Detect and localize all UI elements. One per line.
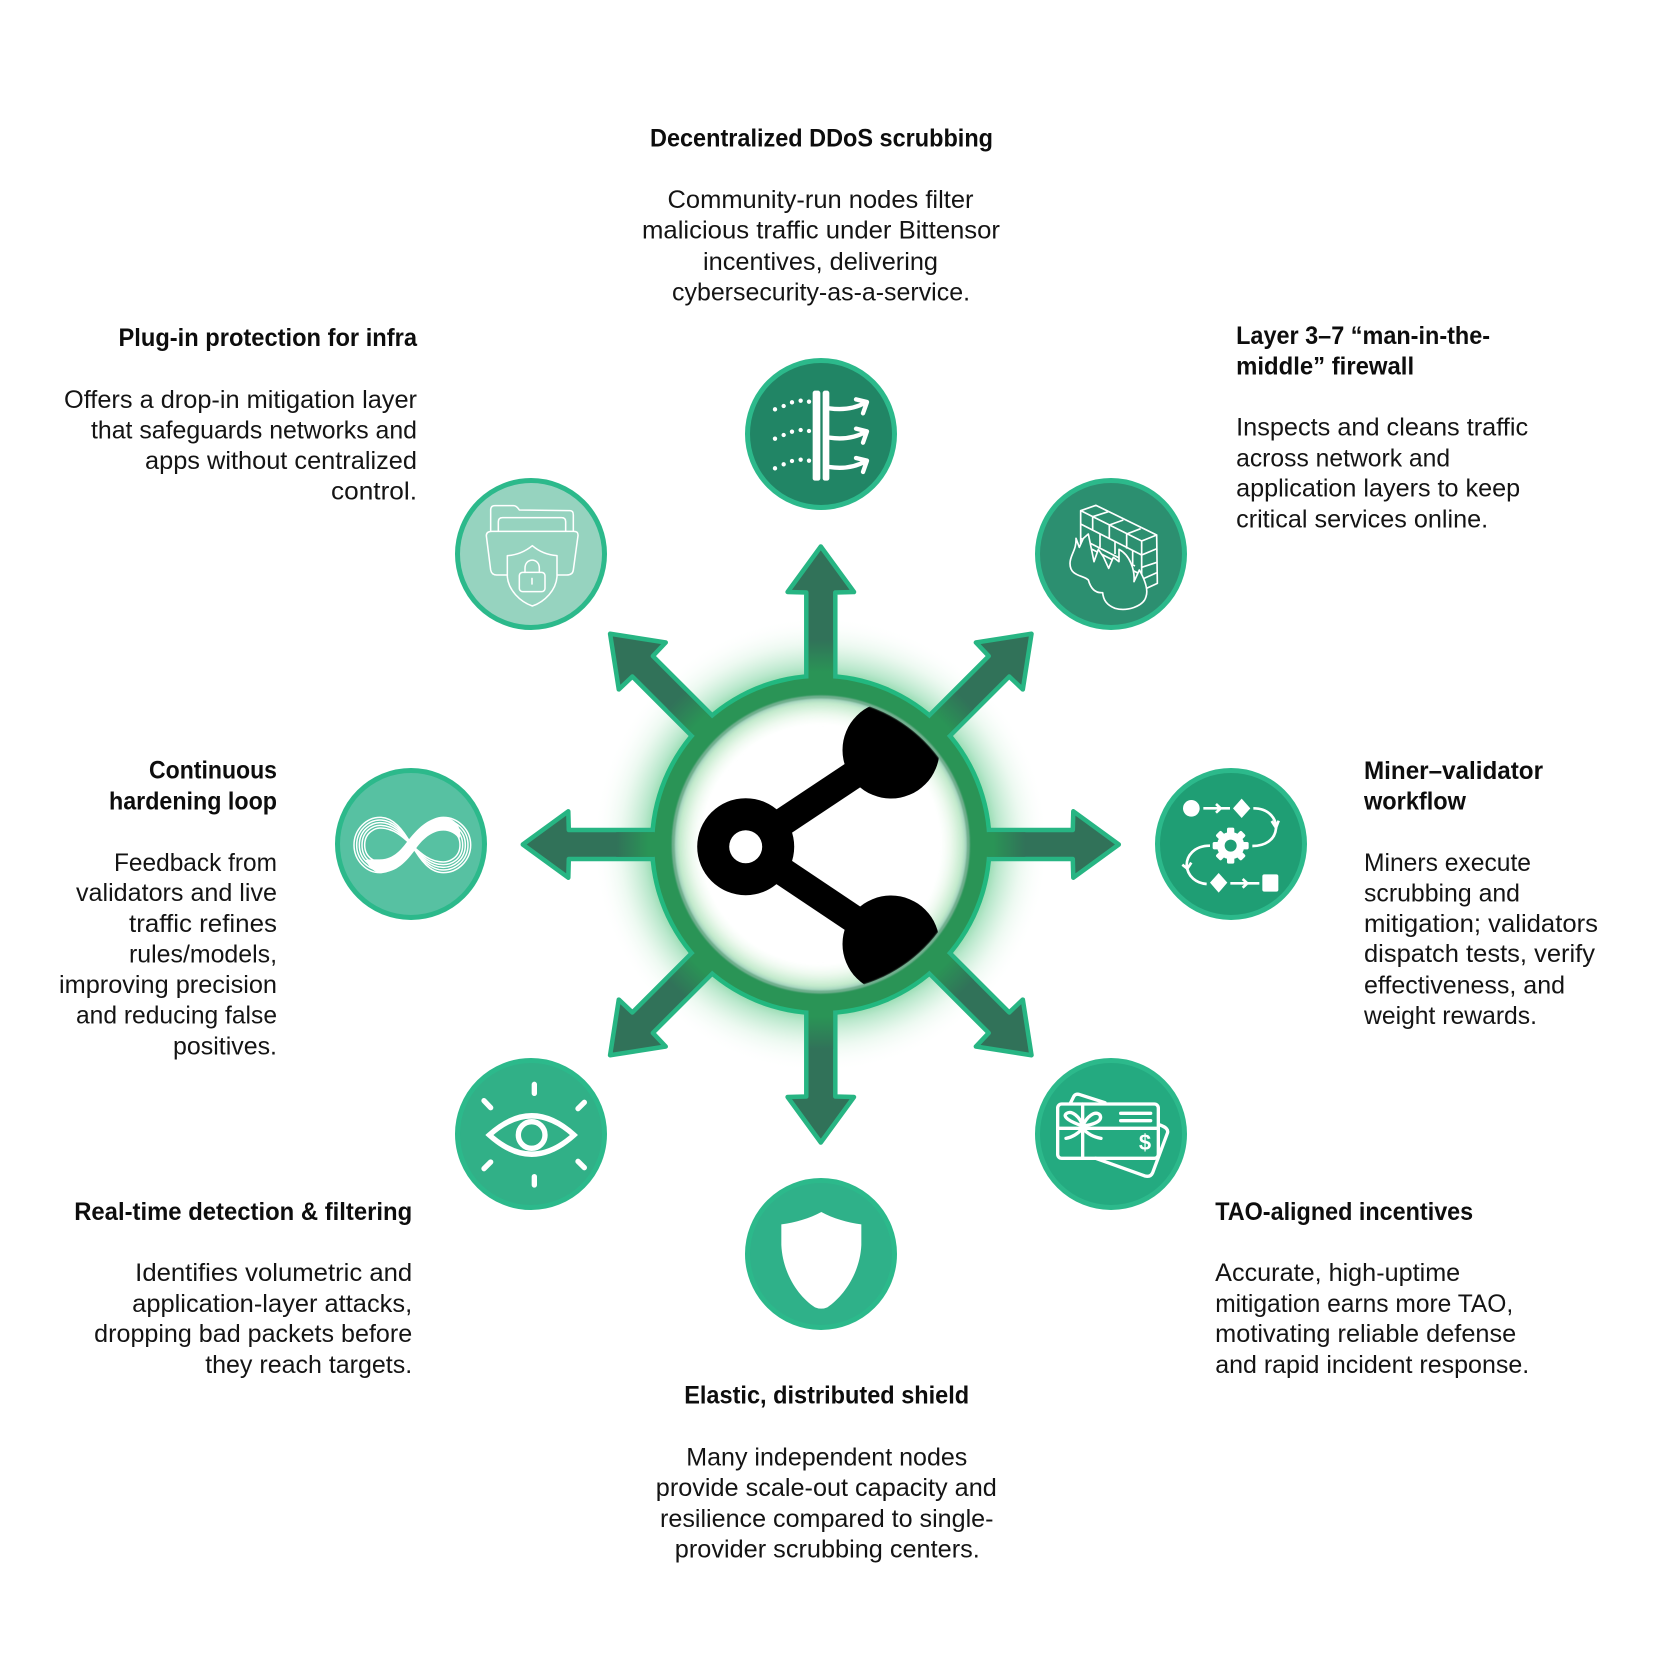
body: [64, 386, 417, 506]
body: Community-run nodes filter: [668, 186, 974, 214]
body: and reducing false: [76, 1002, 277, 1030]
hub dark ring: [654, 678, 987, 1011]
body: they reach targets.: [205, 1351, 412, 1379]
panel: firewall icon: [1038, 480, 1184, 628]
body: control.: [331, 478, 417, 506]
icon: eye: [484, 1084, 584, 1185]
heading: Decentralized DDoS scrubbing: [650, 124, 993, 152]
icon: miner validator flow: [1182, 799, 1279, 893]
body: mitigation earns more TAO,: [1215, 1290, 1513, 1318]
body: across network and: [1236, 444, 1450, 472]
body: dispatch tests, verify: [1364, 940, 1596, 968]
body: [1215, 1259, 1529, 1379]
body: weight rewards.: [1363, 1002, 1537, 1030]
panel: detection icon: [458, 1060, 604, 1208]
icon: shield: [781, 1212, 861, 1309]
arrow: south: [788, 1009, 854, 1142]
heading: workflow: [1363, 787, 1467, 815]
body: effectiveness, and: [1364, 972, 1565, 1000]
body: provider scrubbing centers.: [675, 1536, 980, 1564]
icon: gift cards: $: [1139, 1130, 1151, 1155]
arrows radiating from the hub: [523, 546, 1119, 1142]
body: [1363, 849, 1598, 1030]
body: positives.: [173, 1032, 277, 1060]
text block: TAO-aligned incentives: [1215, 1198, 1529, 1379]
body: mitigation; validators: [1364, 910, 1598, 938]
body: apps without centralized: [145, 447, 417, 475]
arrow: west: [523, 811, 656, 878]
arrow: south-west: [587, 937, 728, 1079]
arrow: north: [788, 546, 854, 680]
arrow: north-west: [587, 610, 728, 752]
text block: elastic distributed shield: [656, 1382, 997, 1564]
body: motivating reliable defense: [1215, 1320, 1516, 1348]
heading: TAO-aligned incentives: [1215, 1198, 1473, 1226]
panel: workflow icon: [1158, 770, 1304, 918]
panel: distributed shield icon: [748, 1180, 894, 1328]
heading: Layer 3–7 “man-in-the-: [1236, 322, 1490, 350]
text block: layer 3-7 firewall: [1236, 322, 1528, 534]
body: Identifies volumetric and: [135, 1259, 412, 1287]
body: critical services online.: [1236, 506, 1488, 534]
body: Offers a drop-in mitigation layer: [64, 386, 417, 414]
heading: Elastic, distributed shield: [684, 1382, 969, 1410]
text block: miner-validator workflow: [1363, 757, 1598, 1030]
arrow: north-east: [914, 610, 1055, 752]
icon: gift cards: [1058, 1094, 1168, 1176]
body: [1236, 414, 1528, 534]
panel: hardening loop icon: [338, 770, 484, 918]
body: [642, 186, 1000, 306]
body: malicious traffic under Bittensor: [642, 216, 1000, 244]
body: Inspects and cleans traffic: [1236, 414, 1528, 442]
central hub with arrows: [523, 546, 1119, 1142]
text block: decentralized DDoS scrubbing: [642, 124, 1000, 306]
body: scrubbing and: [1364, 880, 1520, 908]
text block: plug-in protection: [64, 324, 418, 506]
body: traffic refines: [129, 910, 277, 938]
body: application-layer attacks,: [132, 1290, 412, 1318]
heading: [1236, 322, 1490, 380]
panel: decentralized scrubbing icon: [748, 360, 894, 508]
icon: traffic filtering wall: [773, 391, 867, 481]
arrow: east: [985, 811, 1119, 878]
heading: [1363, 757, 1543, 815]
text block: real-time detection: [74, 1198, 412, 1379]
heading: hardening loop: [109, 788, 277, 816]
text block: continuous hardening loop: [59, 756, 277, 1060]
body: cybersecurity-as-a-service.: [672, 278, 970, 306]
body: resilience compared to single-: [660, 1505, 994, 1533]
hub inner glow: [672, 696, 970, 994]
icon: brick wall with flames: [1070, 505, 1157, 609]
icon: folder with shield and lock: [486, 506, 578, 606]
body: Miners execute: [1364, 849, 1531, 877]
body: rules/models,: [129, 940, 277, 968]
icon: infinity loop: [354, 817, 471, 873]
heading: Plug-in protection for infra: [118, 324, 418, 352]
hub outline: [650, 674, 992, 1016]
body: validators and live: [76, 879, 277, 907]
body: and rapid incident response.: [1215, 1351, 1529, 1379]
body: improving precision: [59, 971, 277, 999]
body: Feedback from: [114, 849, 277, 877]
icon: share network: [697, 702, 940, 992]
body: that safeguards networks and: [91, 416, 417, 444]
heading: Real-time detection & filtering: [74, 1198, 412, 1226]
body: Many independent nodes: [686, 1444, 967, 1472]
arrow: south-east: [914, 937, 1055, 1079]
body: [59, 849, 277, 1060]
panel: plug-in protection icon: [458, 480, 604, 628]
body: [94, 1259, 412, 1379]
body: [656, 1444, 997, 1564]
body: dropping bad packets before: [94, 1320, 412, 1348]
heading: Continuous: [149, 756, 277, 784]
outer glow: [593, 616, 1049, 1072]
body: application layers to keep: [1236, 474, 1520, 502]
panel: incentives icon: [1038, 1060, 1184, 1208]
heading: [109, 756, 277, 816]
body: Accurate, high-uptime: [1215, 1259, 1460, 1287]
body: incentives, delivering: [703, 248, 938, 276]
heading: middle” firewall: [1236, 352, 1414, 380]
body: provide scale-out capacity and: [656, 1474, 997, 1502]
heading: Miner–validator: [1364, 757, 1543, 785]
